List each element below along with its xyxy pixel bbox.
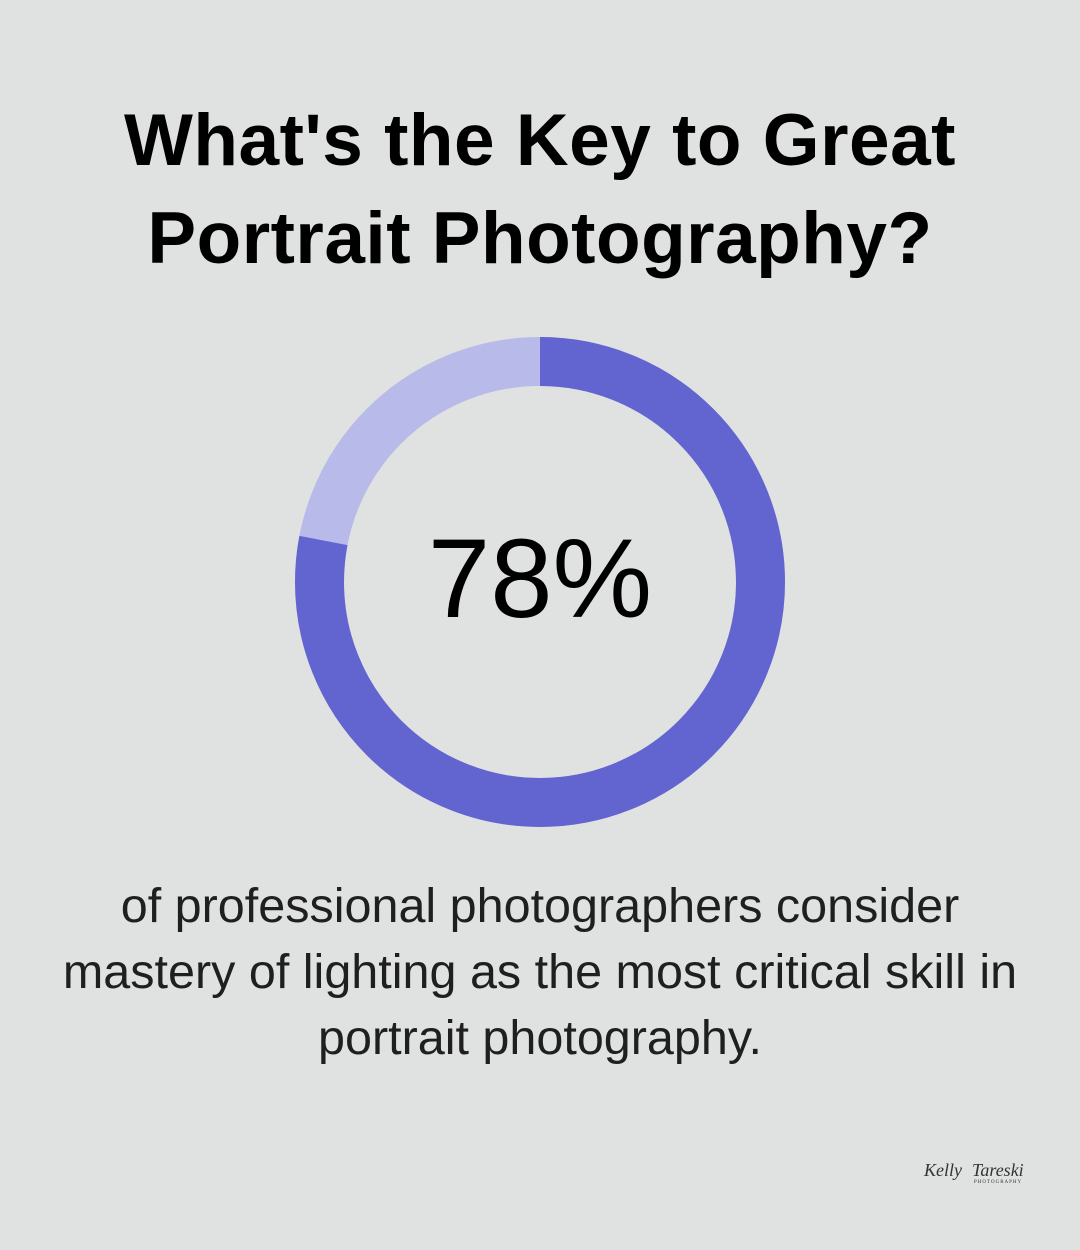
description text	[63, 879, 1017, 1065]
title	[124, 100, 956, 279]
description text: of professional photographers consider	[121, 879, 959, 933]
title: Portrait Photography?	[147, 198, 933, 279]
donut remainder segment	[320, 362, 760, 802]
description text: portrait photography.	[318, 1011, 762, 1065]
donut 78% segment	[320, 362, 760, 802]
logo signature: Tareski	[972, 1160, 1024, 1180]
logo signature: Kelly	[924, 1160, 962, 1180]
description text: mastery of lighting as the most critical skill in	[63, 945, 1017, 999]
logo signature	[924, 1160, 1024, 1185]
logo signature: PHOTOGRAPHY	[974, 1180, 1022, 1185]
title: What's the Key to Great	[124, 100, 956, 181]
percentage label: 78%	[428, 516, 652, 641]
